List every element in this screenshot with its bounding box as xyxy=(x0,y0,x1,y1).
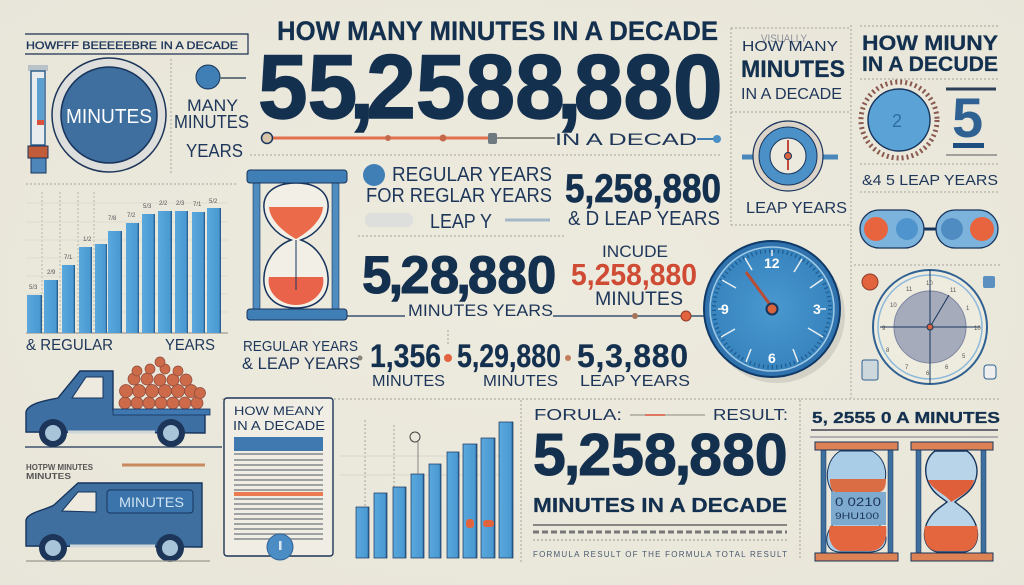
label: many minutes years: YEARS xyxy=(186,141,243,161)
panel: left bar chart xyxy=(26,192,228,354)
text: how many: HOW MANY xyxy=(742,38,838,55)
stat: minutes 2: 5,29,880 xyxy=(457,338,561,374)
icon: left hourglass: 0 0210 xyxy=(835,495,881,509)
label: regular years and leap years xyxy=(242,338,362,373)
icon: sun dial: 2 xyxy=(892,111,902,131)
icon: small seal xyxy=(196,65,246,89)
title: HOW MANY MINUTES IN A DECADE xyxy=(277,16,718,46)
panel: document xyxy=(224,398,333,560)
stat: minutes 1 xyxy=(370,338,452,390)
text: 5 leap years: &4 5 LEAP YEARS xyxy=(862,172,998,189)
text: small truck caption: HOTPW MINUTES xyxy=(26,463,94,472)
text: leap years: LEAP YEARS xyxy=(746,200,847,217)
document heading: HOW MEANY xyxy=(234,404,324,418)
panel: left bar chart: 2/9 xyxy=(47,270,56,276)
text block: include: 5,258,880 xyxy=(571,257,697,292)
icon: left hourglass xyxy=(815,442,898,561)
icon: left hourglass: 9HU100 xyxy=(835,511,879,521)
icon: paired dials xyxy=(860,210,998,248)
chart: bottom bar chart xyxy=(340,420,513,558)
text: minutes in a decade: MINUTES IN A DECADE xyxy=(533,495,787,517)
connector line to minutes years xyxy=(347,315,405,317)
stat: minutes 2 xyxy=(457,338,571,390)
panel: left bar chart: 7/8 xyxy=(108,216,117,222)
label: many minutes years xyxy=(174,96,249,161)
chart: radial dial: 10 xyxy=(926,281,933,287)
panel: left bar chart: 7/2 xyxy=(127,213,136,219)
stat: leap years: 5,3,880 xyxy=(577,338,688,374)
icon: big blue clock: 9 xyxy=(721,301,729,317)
connector line to clock xyxy=(553,311,704,321)
panel: how many minutes leap years xyxy=(741,33,847,217)
icon: numeral five xyxy=(946,86,997,155)
panel: left bar chart: 2/2 xyxy=(159,201,168,207)
chart: radial dial: 1 xyxy=(966,306,970,312)
chart: radial dial: 11 xyxy=(950,288,957,294)
panel: left bar chart: 2/3 xyxy=(176,201,185,207)
icon: big blue clock: 12 xyxy=(764,255,780,271)
label: regular years and leap years: & LEAP YEARS xyxy=(242,354,360,373)
icon: seal xyxy=(267,534,293,560)
label: many minutes years: MINUTES xyxy=(174,112,249,132)
icon: big blue clock xyxy=(704,241,845,383)
headline number: 55,2588,880 xyxy=(258,36,723,138)
van label xyxy=(107,490,193,513)
text: in a decude: IN A DECUDE xyxy=(862,53,998,76)
panel: top-left minutes badge xyxy=(25,34,249,173)
icon: pickup truck with load xyxy=(25,357,222,447)
chart: radial dial: 9 xyxy=(882,326,886,332)
icon: small blue tag xyxy=(983,276,995,288)
text: small truck caption: MINUTES xyxy=(26,472,72,481)
text: minutes heading: 5, 2555 0 A MINUTES xyxy=(812,410,1000,427)
panel: left bar chart: 1/2 xyxy=(83,237,92,243)
chart: radial dial xyxy=(873,270,987,384)
icon: big blue clock: 3 xyxy=(813,301,821,317)
icon: blue coin xyxy=(363,164,385,186)
panel: left bar chart: 5/2 xyxy=(209,199,218,205)
text: formula: FORULA: xyxy=(534,407,622,424)
stat: minutes 2: MINUTES xyxy=(483,373,558,390)
icon: ring dial xyxy=(742,121,838,191)
text: visually: VISUALLY xyxy=(761,33,808,45)
icon: small tag xyxy=(984,365,996,379)
panel: how miuny in a decude xyxy=(860,32,998,248)
icon: big blue clock: 6 xyxy=(768,350,776,366)
stat: leap years: LEAP YEARS xyxy=(580,373,690,390)
stat: minutes 1: 1,356 xyxy=(370,338,441,374)
text block: include: MINUTES xyxy=(595,289,683,310)
badge heading box xyxy=(25,34,248,54)
text: regular years: REGULAR YEARS xyxy=(392,164,552,186)
number: 5,28,880: 5,28,880 xyxy=(362,246,556,305)
chart label: & REGULAR xyxy=(26,337,113,354)
panel: regular years block xyxy=(363,164,552,233)
text block: include: INCUDE xyxy=(602,242,668,261)
chart: radial dial: 6 xyxy=(926,371,930,377)
chart: radial dial: 6 xyxy=(945,365,949,371)
chart: radial dial: 7 xyxy=(905,365,909,371)
icon: minutes badge: MINUTES xyxy=(66,106,152,128)
panel: twin hourglasses xyxy=(810,410,1000,561)
chart: radial dial: 5 xyxy=(962,354,966,360)
icon: orange pin xyxy=(862,274,878,290)
number: 5,258,880 top: 5,258,880 xyxy=(565,167,721,211)
text: result: RESULT: xyxy=(713,407,788,424)
chart: radial dial: 11 xyxy=(906,287,913,293)
chart label: YEARS xyxy=(165,337,215,354)
van label: MINUTES xyxy=(119,494,184,510)
panel: formula result xyxy=(533,407,788,559)
chart: radial dial: 8 xyxy=(886,348,890,354)
chart: radial dial: 10 xyxy=(974,326,981,332)
text: in a decade: IN A DECADE xyxy=(741,86,842,103)
panel: left bar chart: 5/3 xyxy=(143,204,152,210)
label: regular years and leap years: REGULAR YEARS xyxy=(243,338,358,355)
timeline slider xyxy=(262,132,721,144)
panel: radar dial xyxy=(862,270,996,384)
text: leap years: LEAP Y xyxy=(430,211,492,233)
panel: left bar chart: 5/3 xyxy=(29,285,38,291)
document heading line 2: IN A DECADE xyxy=(233,418,325,433)
text: minutes: MINUTES xyxy=(741,56,845,83)
stat: leap years xyxy=(577,338,690,390)
faded marks xyxy=(505,218,550,222)
icon: sun dial xyxy=(861,82,937,158)
icon: delivery van xyxy=(26,483,210,562)
icon: numeral five: 5 xyxy=(952,86,983,149)
text: small truck caption xyxy=(26,463,205,481)
stat: minutes 1: MINUTES xyxy=(372,373,445,390)
text block: include xyxy=(571,242,697,310)
text: how miuny: HOW MIUNY xyxy=(862,32,998,55)
icon: thermometer gauge xyxy=(28,65,48,173)
blurred patch xyxy=(365,213,413,227)
badge heading box: HOWFFF BEEEEEBRE IN A DECADE xyxy=(26,40,238,52)
panel: left bar chart: 7/1 xyxy=(193,202,202,208)
icon: right hourglass xyxy=(911,442,993,561)
text: for regular years: FOR REGLAR YEARS xyxy=(366,185,552,207)
chart: radial dial: 10 xyxy=(890,303,897,309)
number: result total: 5,258,880 xyxy=(533,422,788,488)
icon: stacked note xyxy=(862,360,878,380)
label: many minutes years: MANY xyxy=(187,96,238,115)
text: and d leap years: & D LEAP YEARS xyxy=(568,208,720,230)
icon: minutes badge xyxy=(52,58,166,172)
text: minutes years: MINUTES YEARS xyxy=(408,301,553,320)
text: formula footer: FORMULA RESULT OF THE FORMULA TOTAL RESULT xyxy=(533,550,787,559)
panel: left bar chart: 7/1 xyxy=(64,255,73,261)
icon: large hourglass xyxy=(247,170,347,320)
subheading: in a decade: IN A DECAD xyxy=(555,130,697,149)
